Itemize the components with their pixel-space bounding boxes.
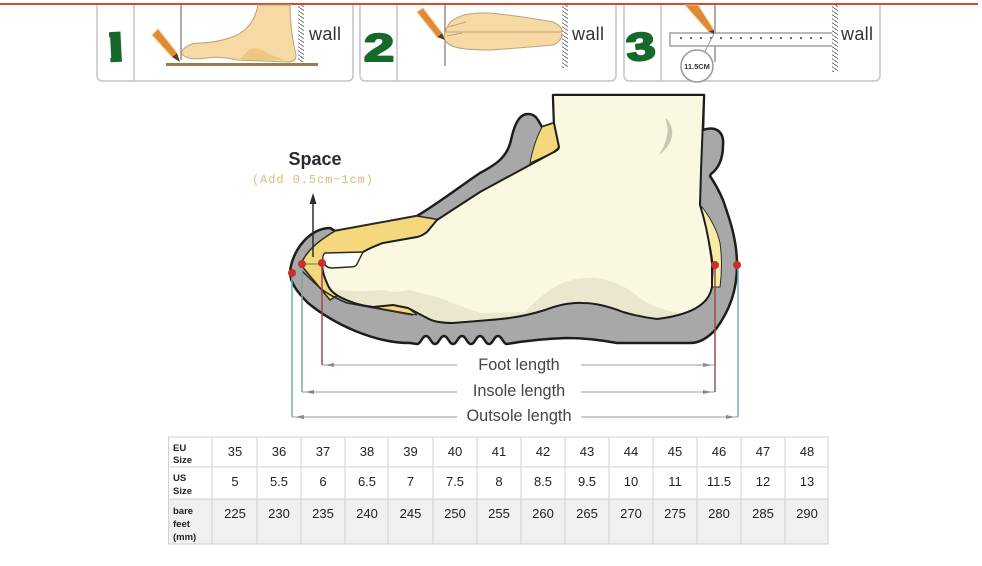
row: bare feet mm: 225 xyxy=(224,506,246,521)
row: EU size: 37 xyxy=(316,444,330,459)
row headers: EU xyxy=(173,443,186,454)
step number 3: 3 xyxy=(624,23,657,70)
row: US size: 12 xyxy=(756,474,770,489)
row: EU size xyxy=(228,444,814,459)
row: bare feet mm: 250 xyxy=(444,506,466,521)
table shaded row xyxy=(168,499,828,544)
foot shading xyxy=(334,278,680,322)
wall label: wall xyxy=(840,24,873,44)
floor xyxy=(166,63,318,66)
yellow heel lining xyxy=(700,207,722,287)
wall label: wall xyxy=(308,24,341,44)
row: bare feet mm: 280 xyxy=(708,506,730,521)
row: US size: 6 xyxy=(319,474,327,489)
row: bare feet mm: 255 xyxy=(488,506,510,521)
row: US size: 11.5 xyxy=(707,474,731,489)
row: bare feet mm: 290 xyxy=(796,506,818,521)
size table xyxy=(168,437,828,544)
row: bare feet mm: 275 xyxy=(664,506,686,521)
insole length line: Insole length xyxy=(473,382,565,400)
panel: step 1 xyxy=(86,5,353,81)
row: EU size: 35 xyxy=(228,444,242,459)
row: EU size: 39 xyxy=(403,444,418,459)
row: US size: 10 xyxy=(624,474,638,489)
inner sole curve xyxy=(302,271,413,315)
row: US size: 11 xyxy=(668,474,682,489)
foot length line xyxy=(322,264,715,374)
shoe diagram xyxy=(290,95,737,344)
measure lines xyxy=(288,259,741,425)
foot outline xyxy=(322,95,712,323)
arrow up xyxy=(310,193,316,257)
top red rule xyxy=(0,3,978,5)
row: US size: 7.5 xyxy=(446,474,464,489)
icon: pencil xyxy=(685,5,714,34)
row headers: US xyxy=(173,473,186,484)
toenail xyxy=(323,252,363,268)
row: EU size: 36 xyxy=(272,444,286,459)
row: US size xyxy=(231,474,814,489)
row: US size: 8 xyxy=(495,474,503,489)
row: US size: 13 xyxy=(800,474,814,489)
row: EU size: 42 xyxy=(536,444,550,459)
ankle bone crescent xyxy=(660,119,672,154)
panel: step 2 xyxy=(360,5,616,81)
row: EU size: 47 xyxy=(756,444,770,459)
row: EU size: 45 xyxy=(668,444,682,459)
wall xyxy=(562,5,568,68)
space note: (Add 0.5cm~1cm) xyxy=(252,173,373,187)
row: bare feet mm: 265 xyxy=(576,506,598,521)
row: US size: 5.5 xyxy=(270,474,288,489)
row: bare feet mm: 260 xyxy=(532,506,554,521)
row headers: feet xyxy=(173,519,191,530)
row: bare feet mm: 235 xyxy=(312,506,334,521)
row: bare feet mm: 240 xyxy=(356,506,378,521)
magnifier callout: 11.5CM xyxy=(684,62,710,71)
yellow toe lining xyxy=(301,216,441,300)
step number 1: 1 xyxy=(86,21,145,73)
foot xyxy=(322,95,712,323)
row: US size: 5 xyxy=(231,474,239,489)
step number 2: 2 xyxy=(364,26,394,70)
wall xyxy=(832,5,838,72)
row headers: bare xyxy=(173,506,193,517)
icon: pencil xyxy=(152,29,180,62)
row: bare feet mm xyxy=(224,506,818,521)
insole length line xyxy=(302,264,715,400)
row: EU size: 46 xyxy=(712,444,726,459)
row headers: Size xyxy=(173,486,192,497)
panel: step 3 xyxy=(624,5,880,82)
row: US size: 6.5 xyxy=(358,474,376,489)
icon: foot top view xyxy=(444,13,562,50)
red points xyxy=(288,259,741,277)
space annotation xyxy=(252,149,373,257)
row: EU size: 48 xyxy=(800,444,814,459)
wall label: wall xyxy=(571,24,604,44)
row headers: (mm) xyxy=(173,532,196,543)
row: bare feet mm: 285 xyxy=(752,506,774,521)
row: EU size: 44 xyxy=(624,444,638,459)
row: US size: 7 xyxy=(407,474,414,489)
small yellow arch lining xyxy=(373,305,417,315)
icon: foot side view xyxy=(182,5,296,62)
wall xyxy=(298,5,304,62)
outsole length line: Outsole length xyxy=(466,407,572,425)
row: bare feet mm: 270 xyxy=(620,506,642,521)
row: US size: 8.5 xyxy=(534,474,552,489)
row headers xyxy=(173,443,196,543)
outsole length line xyxy=(292,265,738,425)
row: bare feet mm: 230 xyxy=(268,506,290,521)
row headers: Size xyxy=(173,455,192,466)
yellow tongue lining xyxy=(530,123,559,163)
row: EU size: 41 xyxy=(492,444,506,459)
row: EU size: 40 xyxy=(448,444,462,459)
magnifier callout xyxy=(681,34,714,82)
row: US size: 9.5 xyxy=(578,474,596,489)
shoe outer shell xyxy=(290,95,737,344)
row: EU size: 43 xyxy=(580,444,594,459)
row: EU size: 38 xyxy=(360,444,374,459)
ruler xyxy=(670,33,833,46)
icon: pencil xyxy=(417,8,445,40)
foot length line: Foot length xyxy=(478,356,560,374)
row: bare feet mm: 245 xyxy=(400,506,421,521)
space heading: Space xyxy=(288,149,342,169)
